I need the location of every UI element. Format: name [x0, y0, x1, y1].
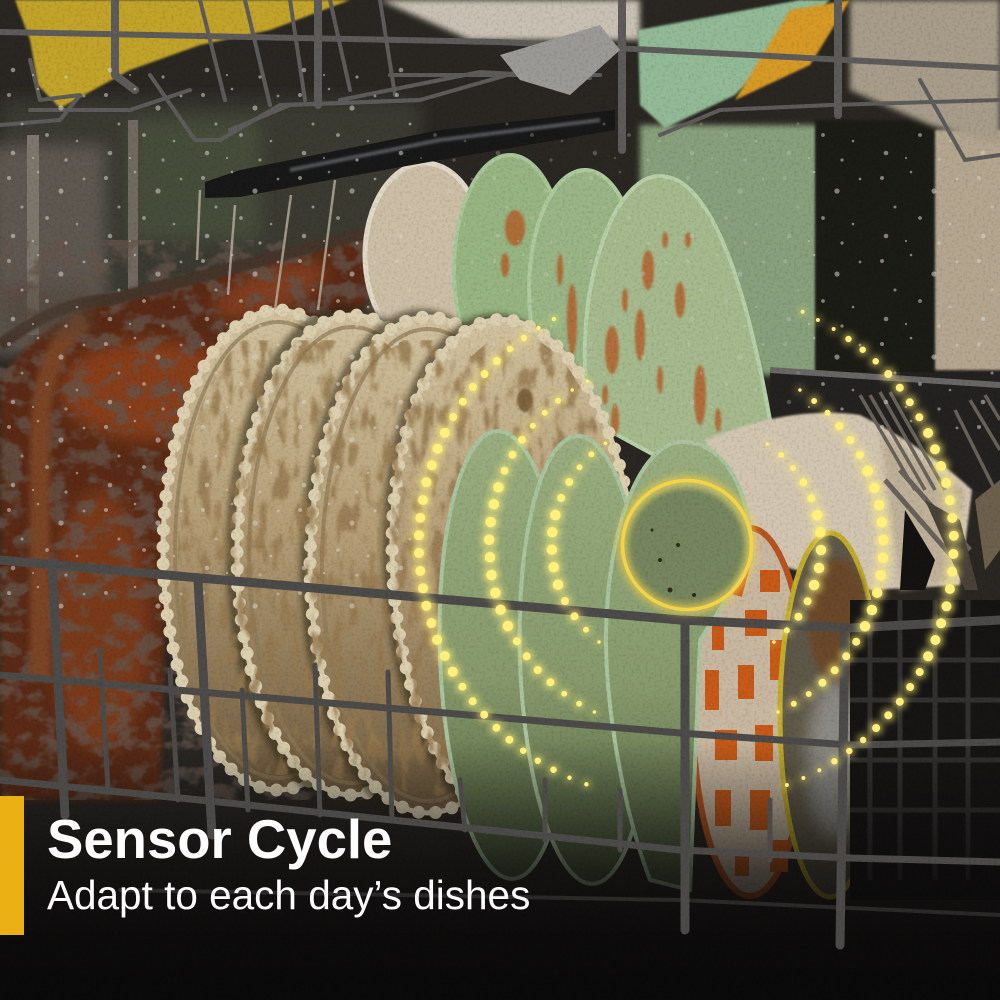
plate 3	[300, 309, 546, 821]
back plates: beige and green	[365, 155, 770, 480]
plate 4	[365, 305, 655, 845]
dishes on the upper rack	[15, 0, 1000, 145]
dots: middle right arc	[778, 390, 883, 712]
dots: inner right arc	[767, 444, 821, 642]
title: Sensor Cycle	[47, 809, 392, 870]
dots: outer right arc	[787, 312, 954, 785]
orange patterned plate and yellow rim plate	[693, 528, 880, 897]
water droplets	[0, 60, 1000, 620]
baking pan with baked-on soil	[0, 232, 375, 800]
rear rail of the lower rack	[770, 370, 1000, 385]
lower rack back grid	[850, 600, 1000, 900]
dots: outer left arc	[419, 319, 586, 784]
water drips and spray arm	[197, 110, 615, 310]
subtitle: Adapt to each day’s dishes	[47, 872, 530, 918]
fluted cream plates	[160, 305, 655, 845]
sensor ring: central yellow circle	[622, 480, 752, 610]
plate food stains	[178, 340, 603, 796]
dots: middle left arc	[489, 381, 594, 712]
lower dish rack	[0, 560, 1000, 945]
bottom shadow	[0, 740, 1000, 1000]
plate 2	[226, 305, 467, 805]
white bowl	[705, 413, 972, 590]
dots: inner left arc	[552, 443, 606, 642]
caption accent bar	[0, 796, 24, 935]
sensor rings: dotted arcs	[419, 312, 954, 785]
plate 1	[163, 310, 393, 790]
upper dish rack	[0, 0, 1000, 160]
forks	[860, 392, 1000, 590]
front green plates	[432, 429, 752, 890]
